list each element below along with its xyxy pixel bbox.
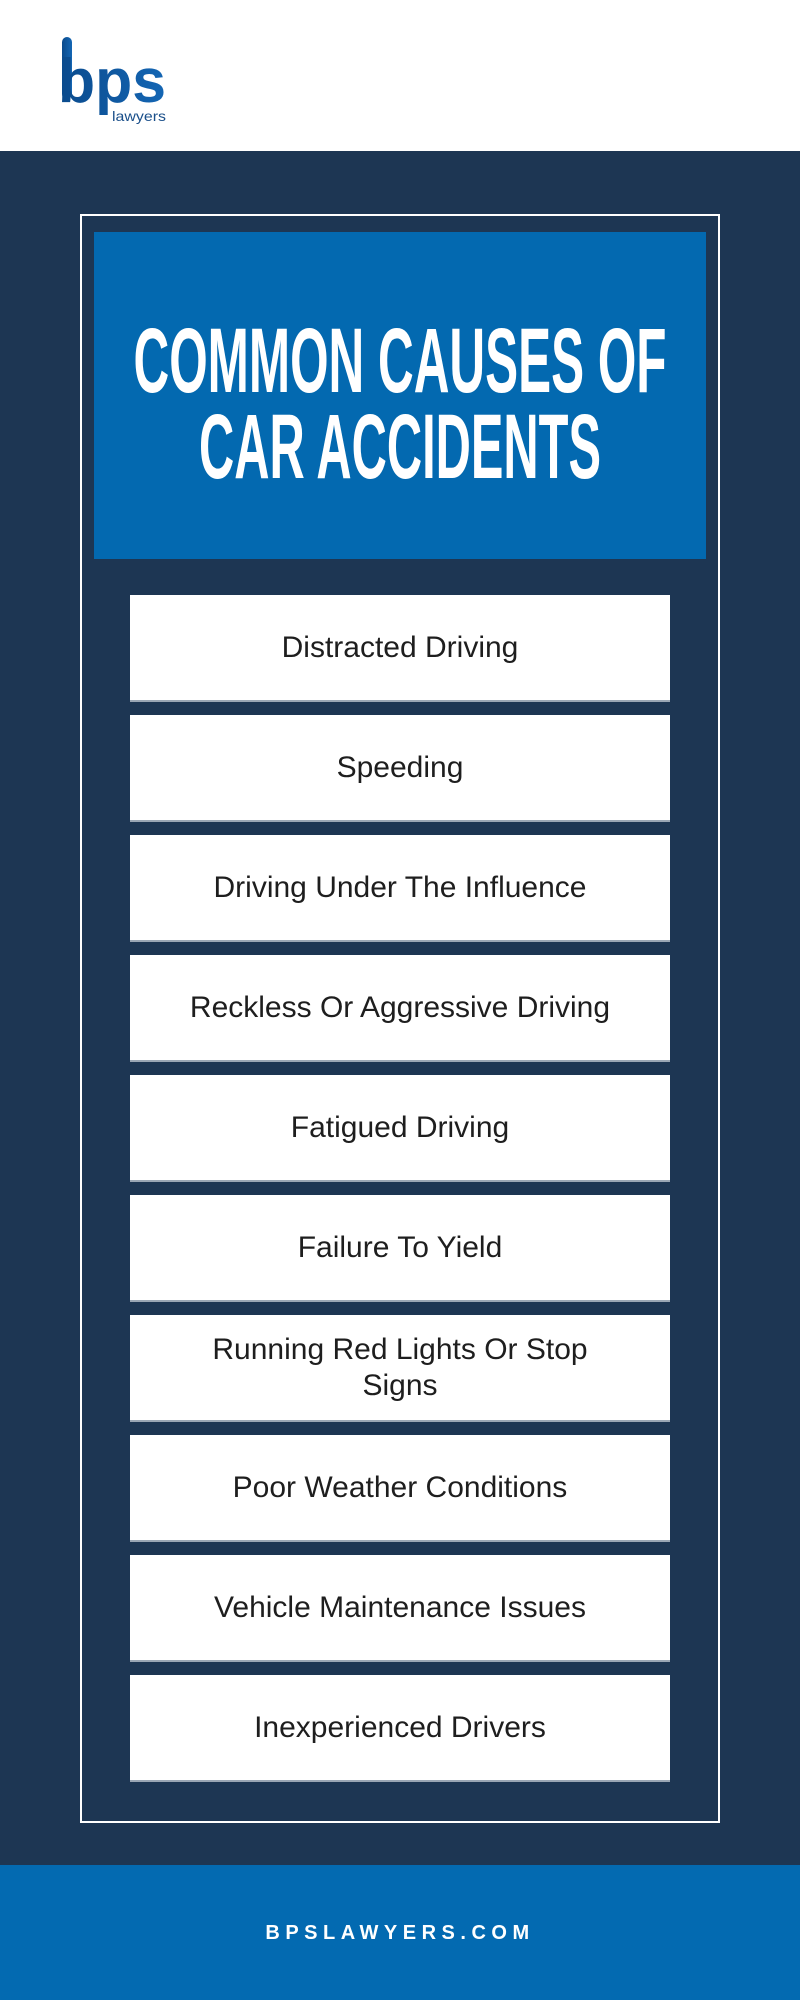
item 10: [130, 1675, 670, 1782]
content frame: [80, 214, 720, 1823]
item 8: Poor Weather Conditions: [233, 1470, 567, 1504]
item 3: Driving Under The Influence: [214, 870, 586, 904]
item 4: [130, 955, 670, 1062]
item 3: [130, 835, 670, 942]
item 2: [130, 715, 670, 822]
item 9: [130, 1555, 670, 1662]
item 6: Failure To Yield: [298, 1230, 502, 1264]
item 9: Vehicle Maintenance Issues: [214, 1590, 586, 1624]
item 8: [130, 1435, 670, 1542]
item 4: Reckless Or Aggressive Driving: [190, 990, 610, 1024]
item 6: [130, 1195, 670, 1302]
item 5: [130, 1075, 670, 1182]
title box: [94, 232, 706, 559]
item 10: Inexperienced Drivers: [254, 1710, 546, 1744]
logo: lawyers: [112, 108, 166, 124]
logo: bps: [58, 47, 166, 116]
footer url: BPSLAWYERS.COM: [265, 1922, 535, 1944]
item 7: Running Red Lights Or Stop: [212, 1332, 588, 1366]
item 1: [130, 595, 670, 702]
item 7: Signs: [362, 1368, 438, 1402]
item 7: [130, 1315, 670, 1422]
footer: [0, 1865, 800, 2000]
item 5: Fatigued Driving: [291, 1110, 509, 1144]
item 1: Distracted Driving: [282, 630, 518, 664]
item 2: Speeding: [337, 750, 463, 784]
header: [0, 0, 800, 151]
title: [134, 310, 666, 498]
